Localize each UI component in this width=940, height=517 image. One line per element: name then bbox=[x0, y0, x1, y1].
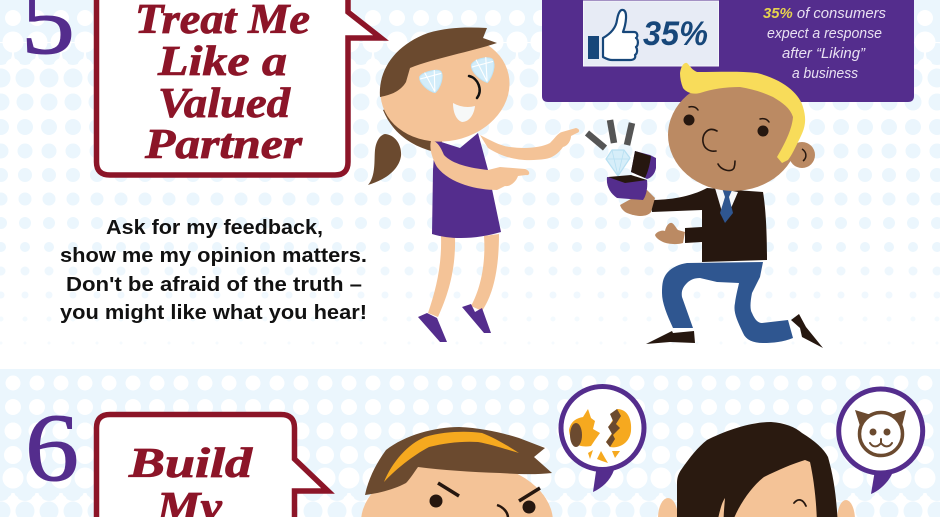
trousers bbox=[662, 262, 793, 343]
bubble heading: Partner bbox=[144, 122, 303, 168]
bubble heading: Like a bbox=[157, 39, 287, 85]
panel text: expect a response bbox=[767, 25, 882, 42]
panel text: 35% of consumers bbox=[763, 5, 886, 22]
panel: 35% statistic bbox=[542, 0, 914, 102]
step number 6: 6 bbox=[25, 394, 79, 501]
hair bbox=[365, 427, 552, 495]
speech bubble: Treat Me Like a Valued Partner bbox=[96, 0, 381, 175]
bubble heading: Valued bbox=[158, 81, 291, 127]
body text: ask for feedback: you might like what you hear! bbox=[60, 302, 367, 324]
panel text: after “Liking” bbox=[782, 45, 866, 62]
near arm bbox=[430, 141, 529, 190]
ponytail bbox=[368, 134, 401, 185]
tie bbox=[720, 188, 733, 223]
smile bbox=[453, 103, 475, 122]
head bbox=[361, 460, 553, 517]
eyebrow bbox=[794, 500, 806, 506]
bubble outline bbox=[96, 414, 328, 517]
icon: fragments bbox=[588, 450, 620, 463]
head bbox=[370, 23, 520, 153]
far arm bbox=[480, 128, 579, 160]
panel background bbox=[542, 0, 914, 102]
character: kneeling man with ring bbox=[587, 63, 823, 348]
body text: ask for feedback: Ask for my feedback, bbox=[106, 217, 323, 239]
shoes bbox=[418, 304, 491, 342]
character: woman with dark hair bbox=[658, 422, 855, 517]
bubble heading: Build bbox=[128, 441, 253, 487]
bubble ring bbox=[871, 470, 893, 494]
speech bubble: Build My bbox=[96, 414, 328, 517]
character: angry man bbox=[361, 427, 553, 517]
icon: ring box with diamond bbox=[606, 150, 656, 200]
ear bbox=[789, 142, 815, 168]
legs bbox=[428, 234, 499, 317]
back hair bbox=[383, 105, 450, 152]
hair highlight bbox=[384, 432, 519, 482]
face bbox=[730, 460, 817, 517]
hair bbox=[680, 63, 805, 163]
35% figure: 35% bbox=[643, 15, 708, 53]
body text: ask for feedback: Don't be afraid of the truth – bbox=[66, 274, 362, 296]
nose bbox=[469, 76, 480, 98]
thumbs up card bbox=[584, 1, 718, 66]
bubble heading bbox=[135, 0, 310, 168]
icon: thumbs up bbox=[588, 10, 638, 60]
panel text: a business bbox=[792, 65, 858, 82]
icon: cat face bbox=[855, 410, 906, 456]
angry eyes bbox=[430, 483, 540, 517]
icon: broken piece right bbox=[606, 409, 631, 447]
icon: diamond eyes bbox=[418, 55, 498, 96]
icon: sparkle rays bbox=[587, 120, 632, 148]
hair bbox=[677, 422, 838, 517]
head bbox=[668, 79, 798, 191]
panel text bbox=[763, 5, 886, 82]
dress bbox=[432, 133, 501, 238]
shoes bbox=[646, 314, 823, 348]
thought bubble: broken object bbox=[561, 386, 644, 492]
shirt bbox=[715, 188, 738, 222]
ears bbox=[658, 498, 678, 517]
thought bubble: cat bbox=[839, 389, 923, 494]
body text: ask for feedback bbox=[60, 217, 367, 324]
icon: broken piece left bbox=[569, 409, 600, 446]
ring hand bbox=[620, 190, 655, 216]
bubble heading bbox=[128, 441, 253, 517]
face features bbox=[684, 107, 769, 171]
character: girl with diamond eyes bbox=[368, 23, 579, 342]
jacket bbox=[650, 188, 767, 262]
bubble outline bbox=[96, 0, 381, 175]
hand bbox=[655, 223, 685, 244]
bubble ring bbox=[593, 468, 614, 492]
body text: ask for feedback: show me my opinion matters. bbox=[60, 245, 367, 267]
front hair bbox=[380, 28, 497, 97]
